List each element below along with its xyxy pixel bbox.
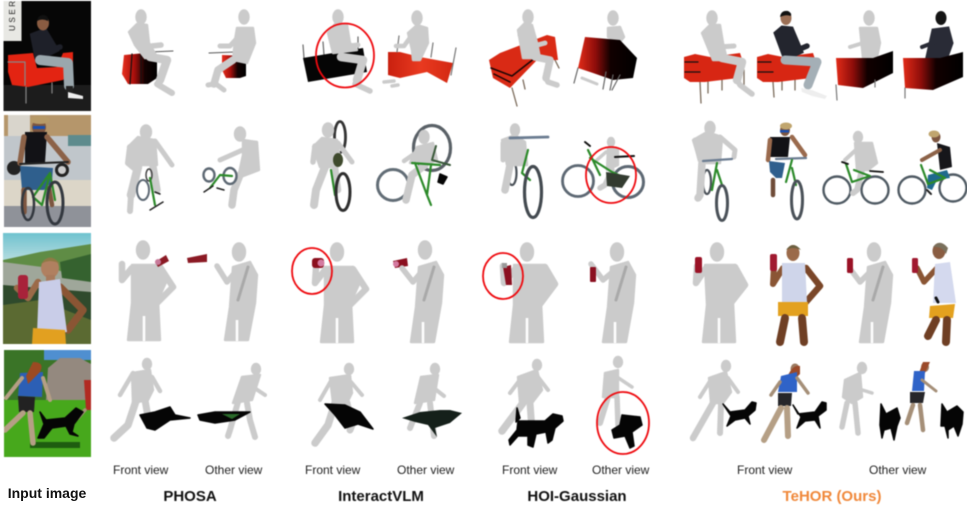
figure: HOI-Gaussian bicycle front view (502, 124, 548, 218)
figure: TeHOR bicycle textured human other view (898, 130, 966, 204)
figure: TeHOR bicycle mesh other view (824, 132, 888, 204)
figure: PHOSA sofa front view (122, 10, 173, 93)
figure: HOI-Gaussian dog other view (600, 357, 642, 448)
figure: HOI-Gaussian bicycle other view (562, 138, 644, 198)
view label: PHOSA front: Front view (113, 463, 169, 477)
panel: InteractVLM column (292, 10, 462, 505)
panel: PHOSA column (113, 10, 265, 505)
figure: PHOSA bicycle front view (128, 126, 172, 211)
figure: TeHOR dog textured human front view (764, 364, 826, 440)
figure: HOI-Gaussian bottle front view (502, 244, 555, 343)
figure: PHOSA dog other view (198, 364, 265, 437)
column title: PHOSA: PHOSA (163, 488, 217, 505)
figure: PHOSA bottle front view (122, 242, 173, 341)
highlight circle: HOI-Gaussian dog (597, 392, 649, 454)
highlight circle: InteractVLM sofa (316, 24, 374, 88)
figure: TeHOR sofa textured human front view (757, 11, 827, 99)
figure: HOI-Gaussian dog front view (502, 360, 563, 447)
highlight circle: HOI-Gaussian bottle (483, 253, 523, 299)
view label: InteractVLM other: Other view (397, 463, 455, 477)
figure: InteractVLM dog other view (402, 364, 462, 437)
view label: HOI-Gaussian front: Front view (502, 463, 558, 477)
figure: TeHOR bottle textured human front view (770, 245, 820, 342)
figure: InteractVLM sofa other view (384, 12, 456, 86)
figure: PHOSA dog front view (114, 359, 190, 438)
view label: TeHOR front: Front view (737, 463, 793, 477)
panel: HOI-Gaussian column (483, 10, 650, 505)
highlight circle: InteractVLM bottle (292, 248, 332, 294)
figure: TeHOR bottle textured human other view (912, 243, 956, 342)
figure: InteractVLM bicycle other view (378, 126, 450, 205)
figure: TeHOR dog textured human other view (907, 362, 963, 438)
figure: TeHOR sofa mesh front view (684, 12, 752, 103)
figure: InteractVLM bicycle front view (313, 122, 352, 210)
figure: HOI-Gaussian sofa other view (574, 12, 637, 90)
figure: InteractVLM sofa front view (303, 10, 370, 91)
column title: TeHOR (Ours): TeHOR (Ours) (783, 488, 881, 505)
figure: InteractVLM bottle front view (312, 244, 366, 343)
highlight circle: HOI-Gaussian bicycle (586, 147, 636, 203)
photo: cyclist on street (4, 115, 91, 227)
figure: HOI-Gaussian sofa front view (489, 10, 559, 106)
figure: PHOSA bicycle other view (204, 128, 259, 205)
view label: InteractVLM front: Front view (305, 463, 361, 477)
figure: TeHOR bottle mesh other view (847, 244, 892, 343)
column title: InteractVLM: InteractVLM (338, 488, 424, 505)
panel: input images column (3, 0, 91, 457)
figure: InteractVLM dog front view (315, 364, 373, 443)
figure: TeHOR bicycle textured human front view (768, 122, 806, 219)
view label: PHOSA other: Other view (205, 463, 263, 477)
figure: TeHOR dog mesh front view (693, 361, 756, 438)
panel: TeHOR (Ours) column (684, 11, 966, 505)
figure: TeHOR bicycle mesh front view (693, 122, 735, 220)
figure: TeHOR bottle mesh front view (695, 244, 745, 343)
figure: InteractVLM bottle other view (393, 242, 443, 343)
view label: HOI-Gaussian other: Other view (592, 463, 650, 477)
figure: TeHOR dog mesh other view (842, 363, 900, 440)
figure: PHOSA sofa other view (208, 10, 255, 90)
figure: TeHOR sofa textured human other view (903, 11, 963, 98)
photo: woman holding red bottle (3, 233, 91, 344)
figure: HOI-Gaussian bottle other view (590, 244, 635, 343)
photo: man seated on red sofa (4, 0, 91, 111)
figure: PHOSA bottle other view (187, 244, 257, 341)
view label: TeHOR other: Other view (869, 463, 927, 477)
column title: Input image: Input image (8, 485, 86, 501)
figure: TeHOR sofa mesh other view (836, 12, 893, 100)
photo: woman running with black dog (4, 350, 91, 457)
column title: HOI-Gaussian: HOI-Gaussian (527, 488, 627, 505)
